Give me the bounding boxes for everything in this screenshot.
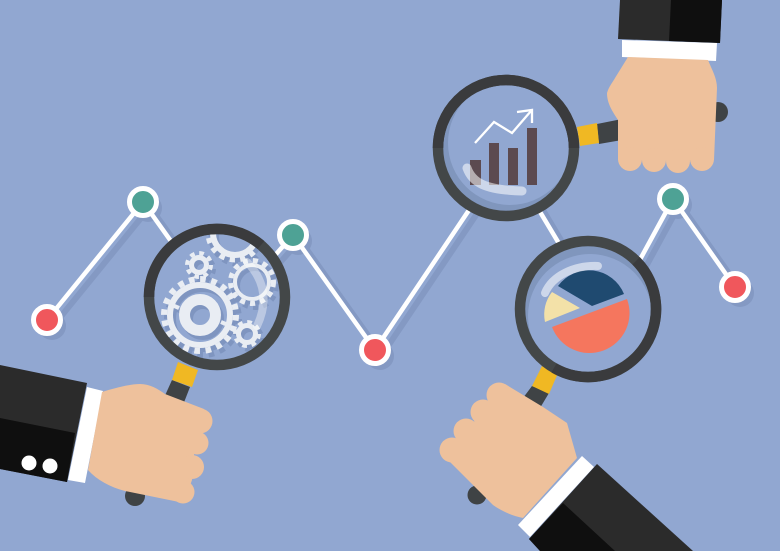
hand (440, 382, 577, 518)
gears (161, 234, 279, 358)
sleeve shadow (669, 0, 722, 43)
line chart (34, 155, 754, 370)
yellow collar (577, 123, 599, 146)
handle end (125, 486, 145, 506)
yellow collar (172, 362, 198, 387)
glare (467, 168, 522, 191)
handle (163, 380, 190, 405)
yellow slice (544, 292, 580, 322)
glare (247, 262, 264, 326)
hand (607, 57, 717, 173)
bar chart (470, 128, 537, 185)
glare (545, 266, 598, 293)
cuff (68, 387, 103, 483)
bottom hand with magnifier over pie chart (440, 241, 693, 551)
lens 2 (438, 80, 574, 216)
ring (149, 229, 285, 365)
white line (47, 155, 735, 350)
node 6 red (722, 274, 748, 300)
handle (597, 119, 622, 144)
left hand with magnifier over gears (0, 206, 285, 506)
sleeve shadow (529, 503, 615, 551)
line shadow (38, 160, 754, 370)
hand (88, 384, 212, 504)
lens 3 (520, 241, 656, 378)
node 4 red (362, 336, 388, 364)
sleeve (0, 365, 87, 482)
node 5 teal (660, 186, 686, 212)
handle (520, 386, 549, 413)
top hand with magnifier over bar chart (438, 0, 728, 216)
coral slice (552, 299, 630, 353)
lens glass (522, 243, 654, 375)
navy slice (558, 270, 624, 306)
handle end (708, 102, 728, 122)
trend arrow (475, 110, 532, 143)
handle end (468, 486, 486, 504)
sleeve shadow (0, 418, 75, 482)
lens glass (440, 82, 572, 214)
ring dark arc (438, 80, 574, 148)
ring dark arc (554, 261, 656, 377)
sleeve (618, 0, 722, 43)
yellow collar (532, 366, 558, 394)
node 1 red (34, 306, 60, 334)
buttons (22, 456, 58, 474)
ring (520, 241, 656, 377)
sleeve (529, 464, 693, 551)
lens 1 (149, 206, 285, 365)
node 2 teal (130, 188, 156, 216)
pie chart (544, 270, 630, 353)
ring dark arc (149, 229, 261, 297)
lens glass (151, 231, 283, 363)
node 3 teal (280, 222, 306, 248)
cuff (518, 456, 594, 537)
cuff (622, 40, 717, 61)
ring (438, 80, 574, 216)
